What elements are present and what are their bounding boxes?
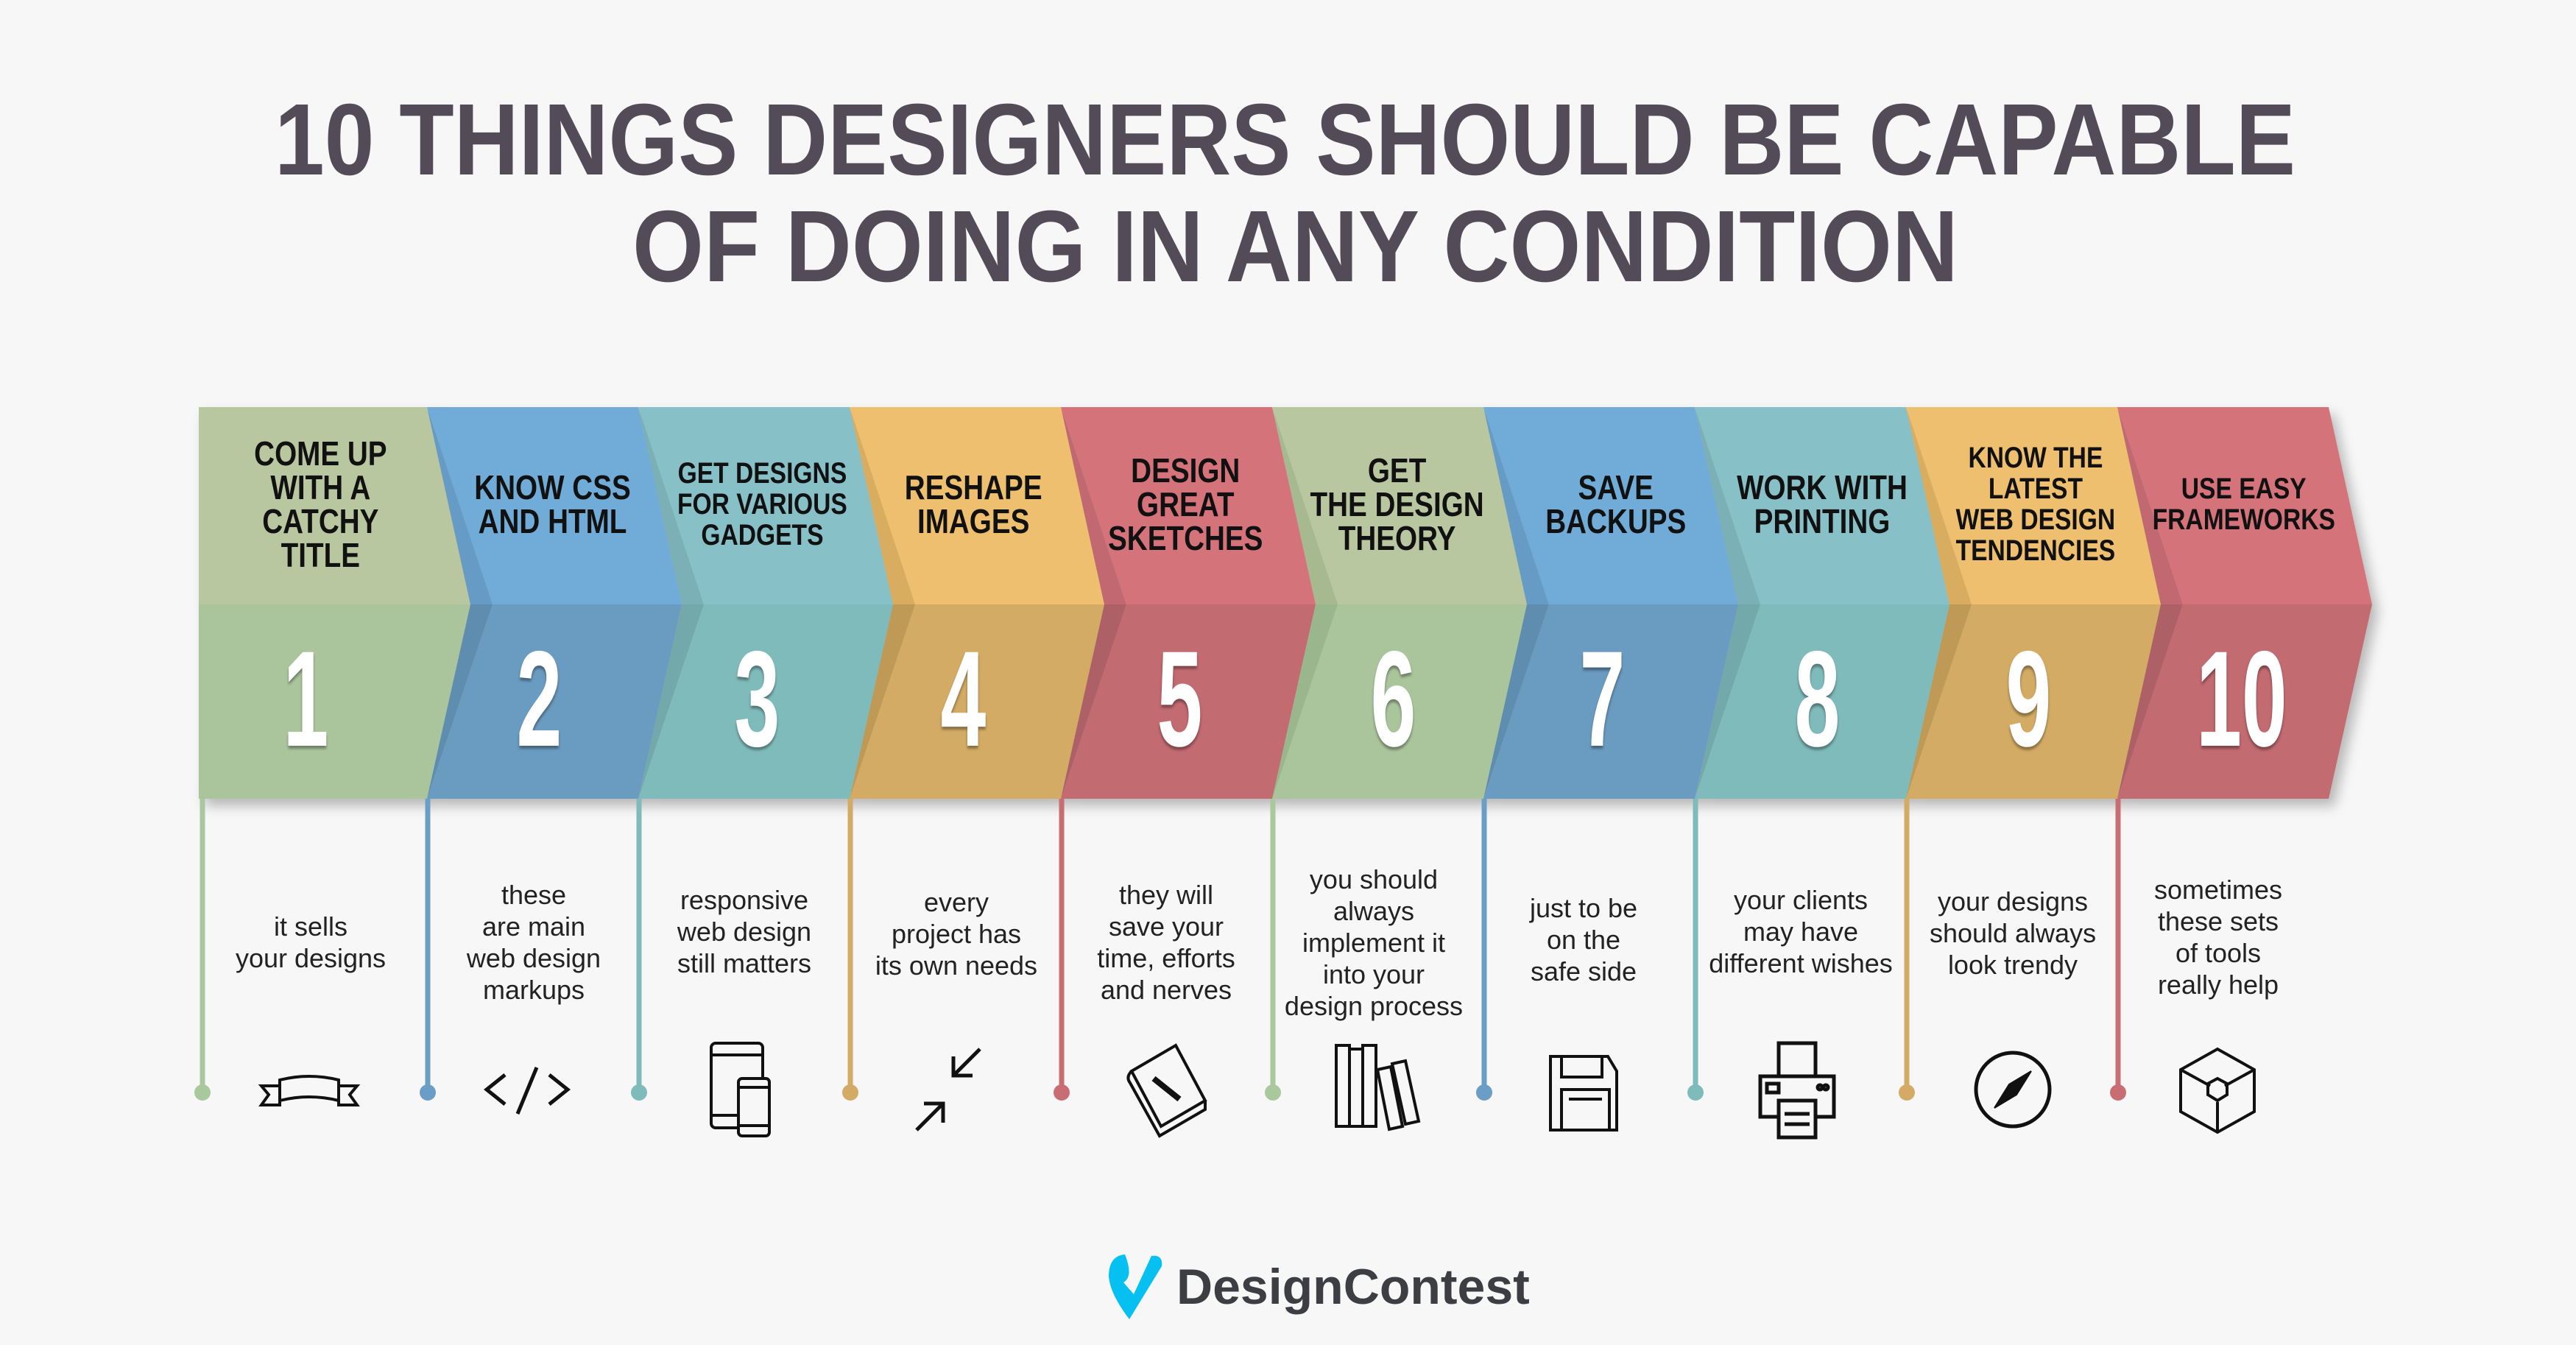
headline 3: GADGETS [701, 519, 823, 551]
segment 10 [2117, 407, 2372, 799]
headline 8: WORK WITH [1737, 468, 1908, 506]
number 10: 10 [2196, 624, 2287, 775]
icon: floppy disk [1549, 1055, 1618, 1132]
icon: compass [1958, 1034, 2068, 1145]
number 3: 3 [734, 624, 780, 775]
headline 8 [1737, 468, 1908, 540]
number 9: 9 [2005, 624, 2051, 775]
headline 10: USE EASY [2181, 473, 2307, 505]
headline 8: PRINTING [1754, 502, 1890, 540]
segment 5 [1061, 407, 1316, 799]
description 10: of tools [2176, 938, 2261, 968]
headline 6: THEORY [1338, 519, 1456, 557]
description 1 [236, 911, 386, 973]
description 6: design process [1285, 991, 1463, 1020]
number 5: 5 [1157, 624, 1202, 775]
description 5: save your [1109, 911, 1224, 942]
number 7: 7 [1579, 624, 1625, 775]
description 6: you should [1310, 864, 1438, 894]
icon: reshape arrows [915, 1048, 981, 1132]
description 2: are main [482, 911, 585, 942]
segment 4 [850, 407, 1104, 799]
description 10: sometimes [2154, 875, 2282, 905]
description 4: every [924, 886, 989, 917]
segment 9 [1906, 407, 2161, 799]
headline 1: WITH A [270, 468, 370, 506]
description 8: may have [1743, 916, 1858, 947]
description 9: should always [1930, 917, 2096, 948]
description 2: markups [483, 975, 585, 1005]
icon: cube [2162, 1034, 2273, 1145]
description 9: your designs [1938, 886, 2088, 916]
description 7: safe side [1531, 956, 1637, 986]
description 5: time, efforts [1097, 943, 1235, 973]
segment 8 [1695, 407, 1949, 799]
description 10 [2154, 875, 2282, 1000]
headline 1: COME UP [254, 434, 387, 473]
headline 1: TITLE [280, 536, 360, 574]
description 6: implement it [1302, 928, 1445, 957]
headline 5: GREAT [1137, 485, 1234, 523]
number 4: 4 [940, 624, 986, 775]
logo text: DesignContest [1176, 1259, 1530, 1315]
headline 2: KNOW CSS [474, 468, 630, 506]
headline 9: KNOW THE [1969, 442, 2103, 474]
headline 9: LATEST [1989, 473, 2083, 505]
description 3: web design [677, 916, 811, 947]
title: 10 THINGS DESIGNERS SHOULD BE CAPABLE [275, 83, 2296, 197]
number 2: 2 [516, 624, 562, 775]
description 7: on the [1547, 925, 1620, 954]
icon: printer [1758, 1041, 1836, 1140]
description 8: different wishes [1709, 948, 1893, 978]
description 3: still matters [677, 948, 811, 978]
headline 5: SKETCHES [1108, 519, 1263, 557]
description 5: they will [1119, 880, 1213, 910]
description 2: these [501, 880, 566, 910]
segment 1 [199, 407, 470, 799]
description 6: into your [1323, 959, 1425, 989]
headline 10: FRAMEWORKS [2153, 504, 2335, 536]
description 1: it sells [274, 911, 347, 942]
headline 5 [1108, 451, 1263, 557]
headline 6: GET [1368, 451, 1427, 490]
headline 4 [905, 468, 1042, 540]
description 5 [1097, 880, 1235, 1005]
description 6 [1285, 864, 1463, 1020]
headline 7: BACKUPS [1545, 502, 1687, 540]
description 3 [677, 885, 811, 978]
icon: tablet and phone [710, 1042, 771, 1137]
number 6: 6 [1370, 624, 1416, 775]
number 1: 1 [283, 624, 328, 775]
description 2 [467, 880, 601, 1005]
number 8: 8 [1794, 624, 1840, 775]
headline 9: TENDENCIES [1956, 534, 2115, 567]
headline 4: IMAGES [917, 502, 1029, 540]
segment 7 [1483, 407, 1738, 799]
description 7 [1529, 892, 1637, 986]
description 9: look trendy [1948, 950, 2078, 979]
title [275, 83, 2296, 303]
headline 1 [254, 434, 387, 574]
headline 9 [1955, 442, 2115, 567]
headline 6: THE DESIGN [1310, 485, 1484, 523]
description 3: responsive [680, 885, 808, 914]
description 8 [1709, 885, 1893, 978]
title: OF DOING IN ANY CONDITION [632, 190, 1958, 303]
headline 9: WEB DESIGN [1956, 504, 2115, 536]
icon: sketchbook [1126, 1043, 1207, 1138]
icon: books [1335, 1044, 1421, 1131]
segment 6 [1272, 407, 1527, 799]
description 10: really help [2158, 970, 2279, 1000]
headline 3 [677, 457, 847, 551]
headline 4: RESHAPE [905, 468, 1042, 506]
headline 7: SAVE [1578, 468, 1654, 506]
description 6: always [1333, 895, 1414, 926]
description 1: your designs [236, 943, 386, 973]
segment 2 [427, 407, 682, 799]
description 4 [875, 886, 1037, 981]
icon: banner ribbon [258, 1075, 361, 1106]
headline 1: CATCHY [262, 502, 378, 540]
logo [1104, 1252, 1546, 1325]
segment 3 [638, 407, 893, 799]
icon: logo heart check [1104, 1252, 1171, 1325]
headline 6 [1310, 451, 1484, 557]
description 5: and nerves [1101, 975, 1232, 1005]
description 9 [1930, 886, 2096, 979]
headline 5: DESIGN [1131, 451, 1240, 490]
headline 2 [474, 468, 630, 540]
headline 3: GET DESIGNS [677, 457, 847, 490]
icon: code brackets [484, 1067, 571, 1115]
headline 7 [1545, 468, 1687, 540]
headline 10 [2153, 473, 2335, 536]
description 8: your clients [1734, 885, 1868, 914]
description 2: web design [467, 943, 601, 973]
headline 3: FOR VARIOUS [677, 488, 847, 520]
headline 2: AND HTML [478, 502, 627, 540]
description 7: just to be [1530, 892, 1637, 923]
description 4: its own needs [875, 950, 1037, 981]
description 4: project has [892, 919, 1021, 948]
description 10: these sets [2158, 906, 2279, 936]
chevron banner [199, 407, 2384, 813]
